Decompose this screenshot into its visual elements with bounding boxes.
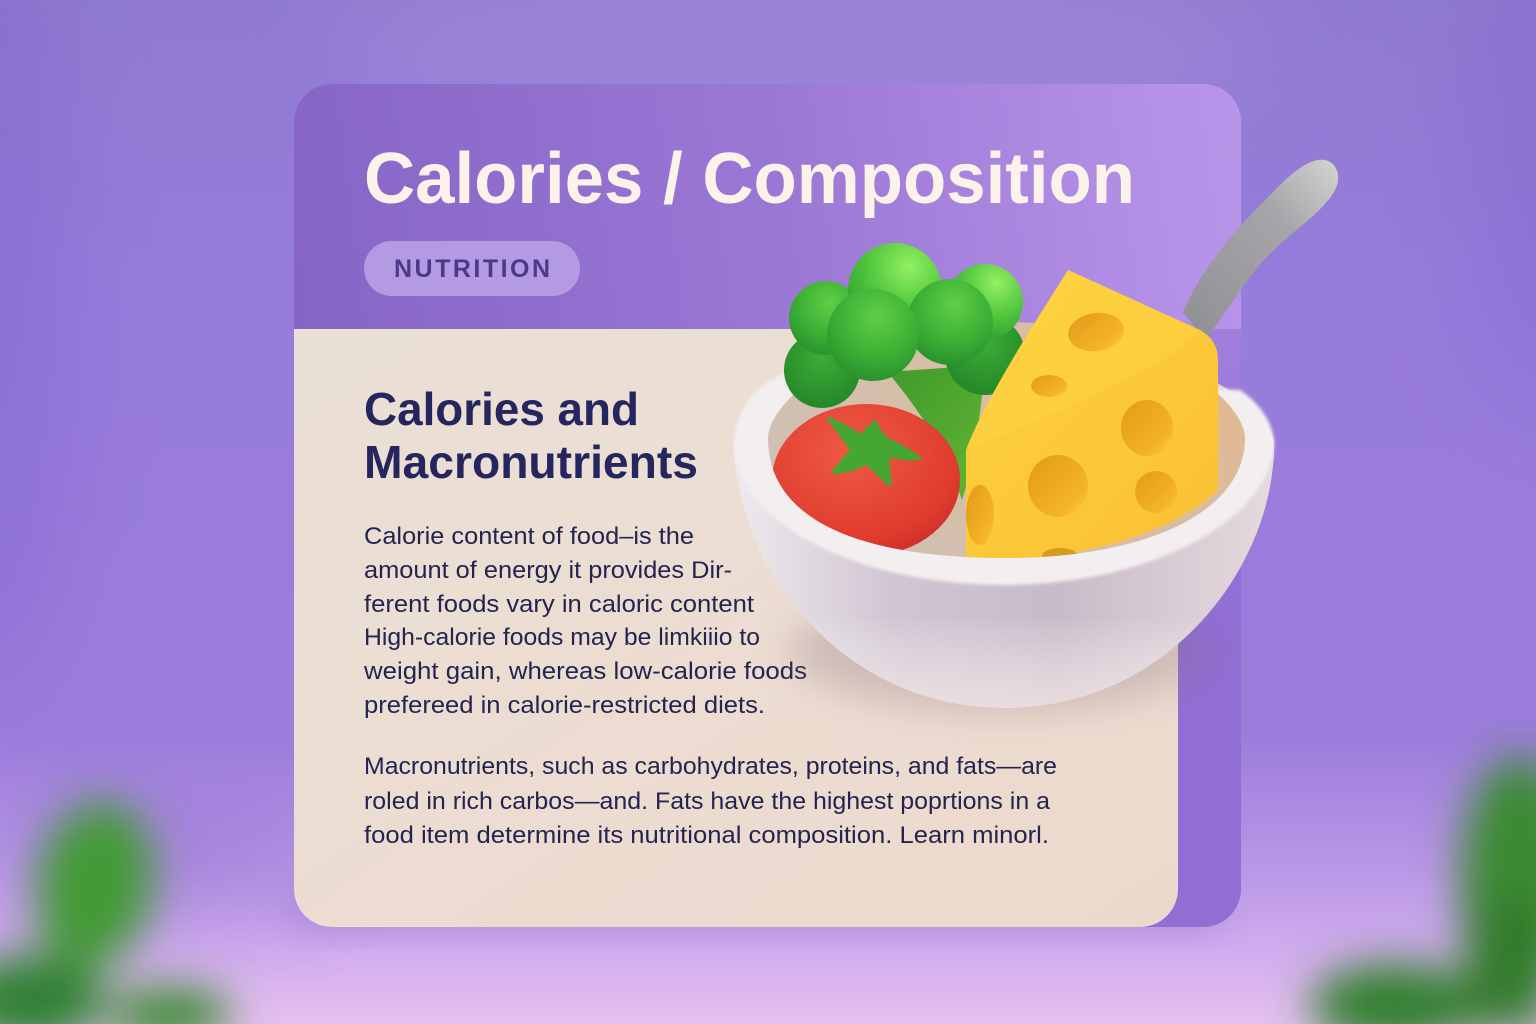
text block: paragraph 2 [364, 753, 1057, 849]
bowl shadow [790, 590, 1210, 710]
panel: purple back [294, 84, 1241, 927]
food inside bowl [772, 243, 1218, 564]
icon: spoon [1183, 160, 1338, 340]
panel: cream body [294, 329, 1178, 927]
text block: paragraph 1 [363, 523, 807, 719]
bowl body [734, 330, 1274, 708]
icon: broccoli [784, 243, 1025, 500]
text block: paragraph 1: ferent foods vary in caloric content [364, 591, 754, 618]
text block: paragraph 1: Calorie content of food–is the [364, 523, 694, 550]
text block: paragraph 1: amount of energy it provides Dir- [364, 557, 732, 584]
bowl interior [768, 322, 1245, 558]
text block: paragraph 2: food item determine its nutritional composition. Learn minorl. [364, 822, 1049, 849]
bowl of food illustration [734, 160, 1338, 710]
heading: Calories and [364, 383, 639, 435]
bowl rim [734, 372, 1274, 585]
blurred plant: bottom left [0, 791, 232, 1024]
panel: card [294, 84, 1241, 927]
panel: header [294, 84, 1241, 329]
title: Calories / Composition [364, 139, 1135, 219]
text block: paragraph 1: High-calorie foods may be limkiiio to [364, 624, 760, 651]
card shadow [290, 890, 1220, 930]
icon: cheese [966, 270, 1218, 564]
text block: paragraph 2: Macronutrients, such as carbohydrates, proteins, and fats—are [364, 753, 1057, 780]
text block: paragraph 1: prefereed in calorie-restricted diets. [364, 692, 765, 719]
heading: Macronutrients [364, 436, 698, 488]
heading [364, 383, 698, 488]
text block: paragraph 2: roled in rich carbos—and. Fats have the highest poprtions in a [364, 788, 1050, 815]
badge: nutrition [364, 241, 580, 296]
text block: paragraph 1: weight gain, whereas low-calorie foods [363, 658, 807, 685]
icon: tomato [772, 404, 960, 556]
blurred plant: bottom right [1310, 755, 1536, 1024]
badge: nutrition: NUTRITION [394, 255, 550, 283]
